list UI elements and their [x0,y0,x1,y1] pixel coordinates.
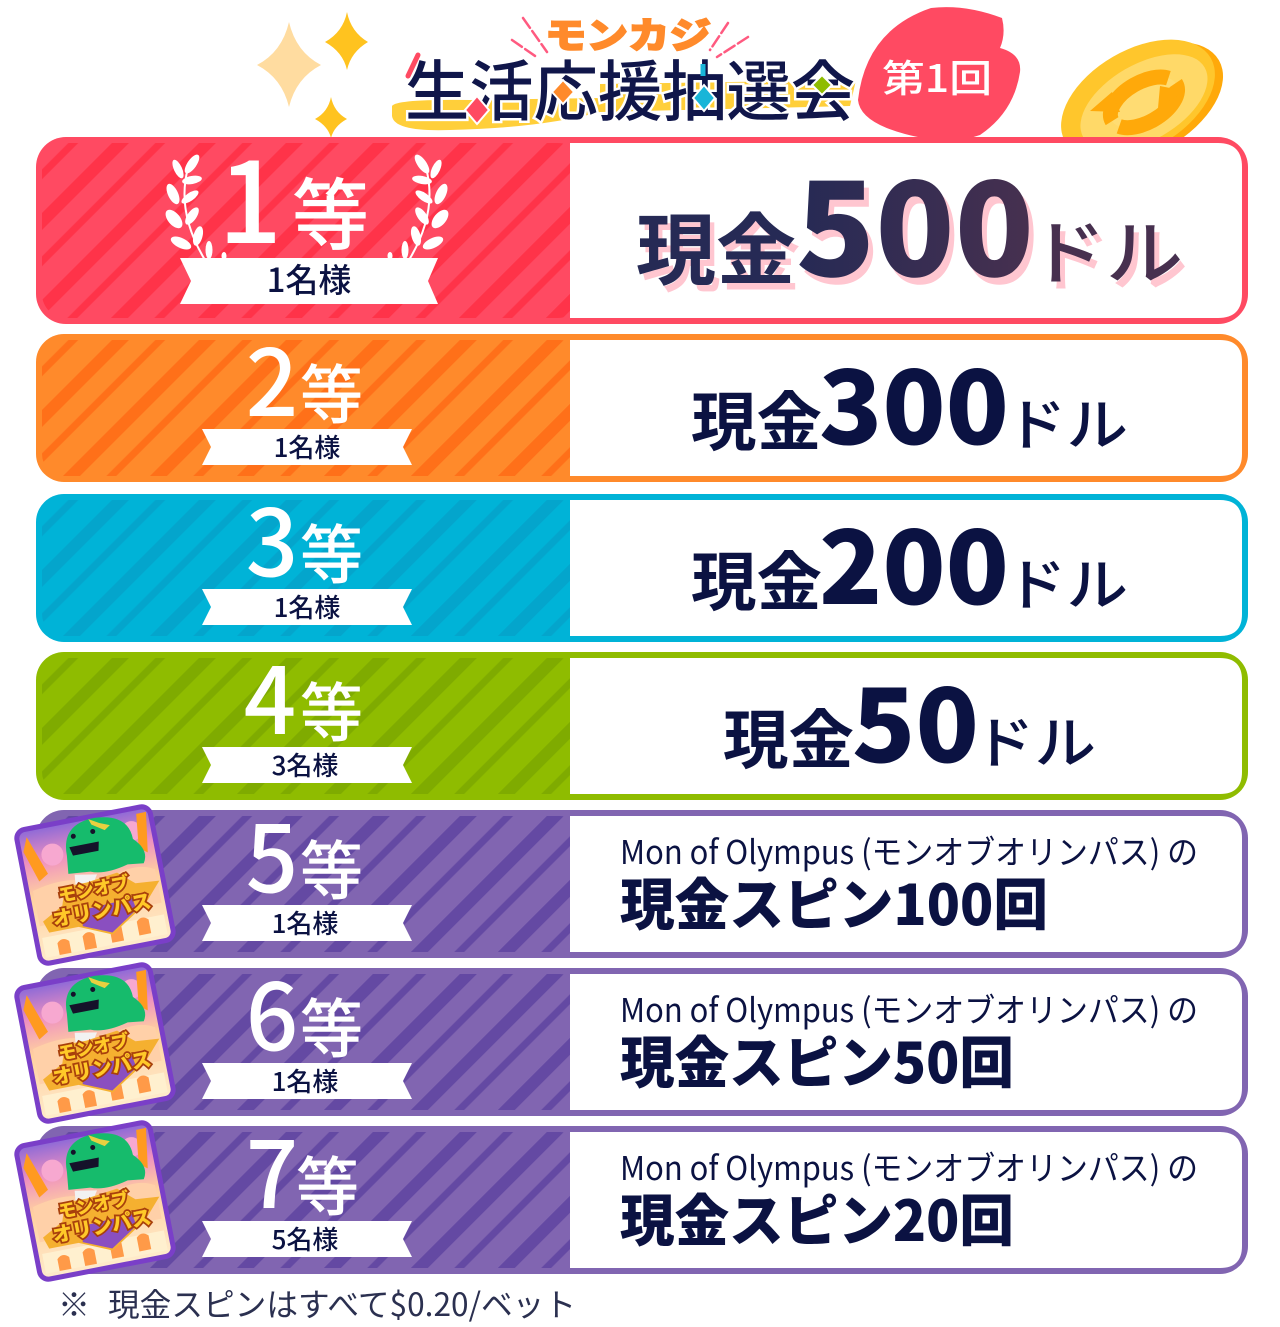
rank: 3rd [246,470,363,603]
ribbon [202,1062,412,1099]
prize amount [691,328,1128,473]
rank: 2nd: 等 [300,345,363,437]
prize amount: 200 [819,488,1009,633]
prize description: Mon of Olympus (モンオブオリンパス) の [620,984,1198,1032]
prize row 7 [15,1102,1248,1281]
rank: 5th [246,786,363,919]
prize amount: ドル [973,699,1096,780]
game icon: モンオブ [56,1027,131,1066]
badge: first edition [858,7,1020,140]
ribbon: 5名様 [272,1220,338,1257]
ribbon [202,904,412,941]
rank: 2nd [246,310,363,443]
rank: 4th [244,628,363,761]
ribbon [202,746,412,783]
rank: 4th: 等 [300,663,363,755]
footnote: ※ [58,1280,90,1326]
prize description [620,826,1198,942]
rank: 6th: 等 [300,979,363,1071]
ribbon: 1名様 [274,588,340,625]
prize row 6 [15,944,1248,1123]
game icon: オリンパス [50,1201,153,1248]
prize description [620,1142,1198,1258]
rank: 1st: 等 [292,154,369,266]
prize amount [723,646,1096,791]
game icon [15,963,175,1123]
prize description: Mon of Olympus (モンオブオリンパス) の [620,1142,1198,1190]
prize amount: 500 [796,128,1034,313]
title accents [408,55,832,124]
rank: 2nd: 2 [246,310,298,443]
ribbon: 1名様 [274,428,340,465]
prize description: 現金スピン100回 [620,861,1048,942]
brand name: モンカジ [545,7,711,59]
prize description: 現金スピン50回 [620,1019,1014,1100]
prize amount: 300 [819,328,1009,473]
ribbon [202,1220,412,1257]
sparkles [257,12,368,138]
prize amount: 500 [801,135,1039,320]
game icon: オリンパス [50,885,153,932]
prize amount [691,488,1128,633]
prize row 4 [36,628,1248,800]
prize amount: 現金 [691,372,822,464]
prize amount [636,128,1188,320]
game icon [15,805,175,965]
prize row 1 [36,114,1248,324]
game icon [15,1121,175,1281]
prize amount: 50 [852,646,979,791]
prize row 3 [36,470,1248,642]
footnote: 現金スピンはすべて$0.20/ベット [108,1280,576,1326]
rank: 7th [246,1102,359,1235]
badge: first edition: 第1回 [882,48,992,103]
ribbon: 3名様 [272,746,338,783]
rank: 7th: 等 [296,1137,359,1229]
prize amount: 現金 [723,690,854,782]
rank: 1st: 1 [218,114,282,276]
prize row 5 [15,786,1248,965]
rank: 5th: 等 [300,821,363,913]
prize amount: 現金 [691,532,822,624]
rank: 6th: 6 [246,944,298,1077]
ribbon [180,254,438,304]
rank: 4th: 4 [244,628,296,761]
game icon: モンオブ [56,869,131,908]
prize amount: 現金 [636,189,796,301]
prize row 2 [36,310,1248,482]
prize amount: 現金 [641,196,801,308]
ribbon [202,588,412,625]
prize amount: ドル [1005,381,1128,462]
ribbon: 1名様 [267,254,351,302]
rank: 1st [218,114,369,276]
coin icon [1040,12,1244,190]
rank: 6th [246,944,363,1077]
prize amount: ドル [1034,205,1188,306]
prize amount: ドル [1005,541,1128,622]
game icon: モンオブ [56,1185,131,1224]
rank: 7th: 7 [246,1102,298,1235]
prize amount: ドル [1029,198,1183,299]
prize description [620,984,1198,1100]
ribbon: 1名様 [272,904,338,941]
burst lines [512,18,748,58]
title text: 生活応援抽選会 [405,39,855,135]
game icon: オリンパス [50,1043,153,1090]
rank: 3rd: 3 [246,470,298,603]
rank: 5th: 5 [246,786,298,919]
title logo [392,7,856,135]
rank: 3rd: 等 [300,505,363,597]
prize description: 現金スピン20回 [620,1177,1014,1258]
ribbon [202,428,412,465]
laurel right [388,152,452,260]
laurel left [162,152,226,260]
prize description: Mon of Olympus (モンオブオリンパス) の [620,826,1198,874]
ribbon: 1名様 [272,1062,338,1099]
